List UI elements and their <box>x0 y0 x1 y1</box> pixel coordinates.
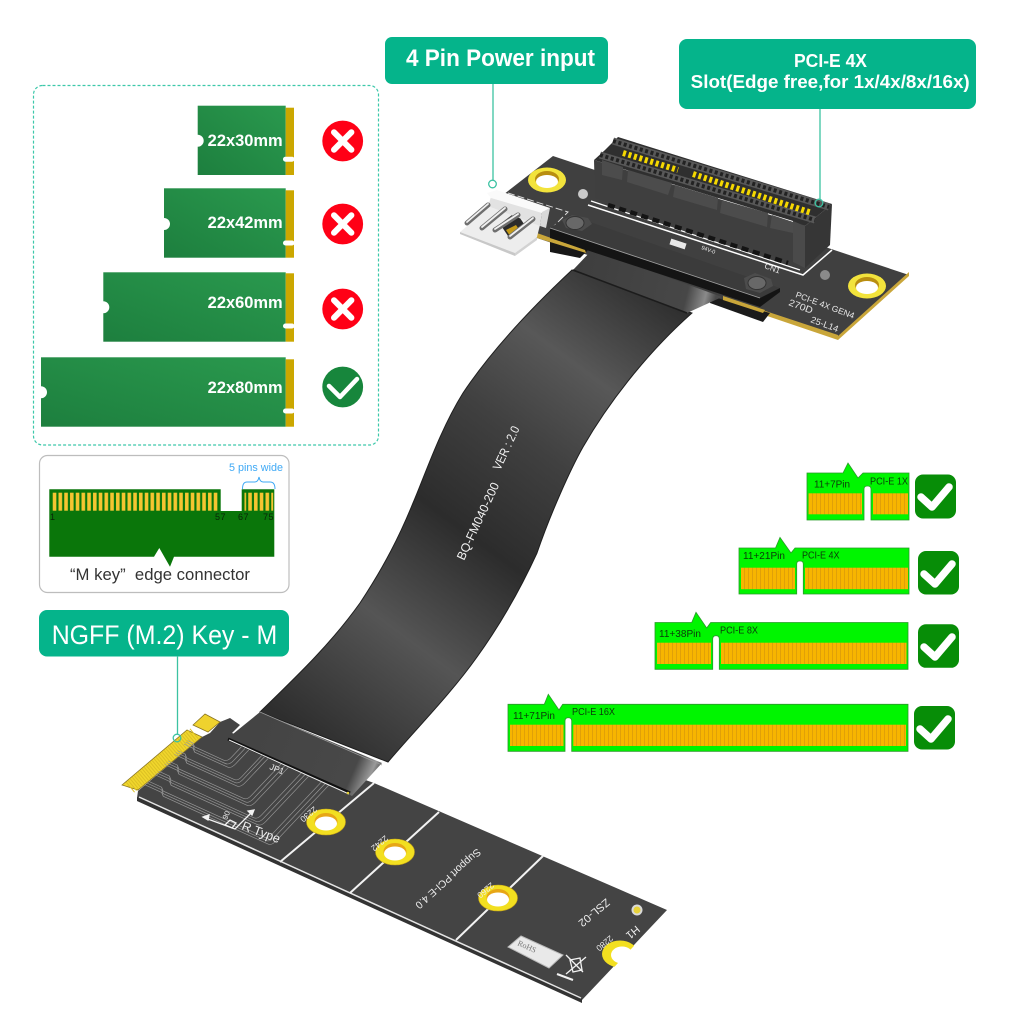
4 pin power connector <box>460 190 550 256</box>
power pin highlights <box>467 204 533 236</box>
icon: rejected 22x42 <box>322 204 363 244</box>
leader: NGFF edge <box>173 656 181 742</box>
board silkscreen text: 270D <box>787 298 814 317</box>
slot comb: front row base <box>600 155 815 220</box>
PCB: M.2 board <box>122 714 700 1003</box>
pins: contacts 1 to 57 <box>52 493 219 511</box>
test point <box>632 904 642 916</box>
mounting hole: 2242 <box>376 839 414 865</box>
PCB: PCI-E adapter board <box>490 156 909 340</box>
R type right-angle symbol <box>203 810 254 829</box>
slot card: PCI-E 4X <box>739 538 909 594</box>
card: 22x42mm: 22x42mm <box>208 214 283 232</box>
slot card: PCI-E 16X: 11+71Pin <box>513 710 555 722</box>
icon: check 4X <box>918 551 959 594</box>
panel: M key edge connector <box>40 456 289 592</box>
slot card: PCI-E 16X <box>508 694 908 751</box>
slot comb: rear row teeth <box>613 141 829 207</box>
ribbon cable <box>260 270 692 762</box>
mounting hole: 2230 <box>306 809 346 835</box>
board silkscreen text: 2230 <box>298 804 319 824</box>
icon: rejected 22x30 <box>322 121 363 161</box>
label: 4 Pin Power input: 4 Pin Power input <box>406 45 595 72</box>
board traces <box>143 727 329 846</box>
cable print: model and version <box>454 424 523 562</box>
leader: PCI-E slot <box>815 109 823 207</box>
board silkscreen text: 94V-0 <box>700 245 716 256</box>
cable print: model and version: VER : 2.0 <box>490 424 523 472</box>
pin numbers: 57 <box>215 512 226 522</box>
front panels <box>602 160 793 233</box>
callout: 5 pins wide: 5 pins wide <box>229 462 283 474</box>
pins: contacts 67 to 75 <box>244 493 273 511</box>
icon: check 8X <box>918 624 959 668</box>
board silkscreen text: Support PCI-E 4.0 <box>412 846 483 911</box>
slot card: PCI-E 1X: PCI-E 1X <box>870 475 908 487</box>
caption: M key edge connector: “M key” edge connector <box>70 565 250 584</box>
button: right <box>744 273 773 293</box>
slot card: PCI-E 8X: 11+38Pin <box>659 628 701 640</box>
board silkscreen text <box>221 762 642 953</box>
label: PCI-E 4X slot: Slot(Edge free,for 1x/4x/8x/16x) <box>691 72 970 92</box>
mounting notch: 2280 <box>582 910 700 1001</box>
underside: black clamp pieces <box>537 233 770 322</box>
leader: power input <box>489 84 496 188</box>
mounting hole: 2260 <box>478 885 518 911</box>
cable strain relief: top <box>573 250 722 313</box>
board silkscreen text: JP1 <box>268 762 286 776</box>
length dividers <box>280 783 543 940</box>
mounting hole: right <box>848 274 886 298</box>
pin numbers: 75 <box>263 512 274 522</box>
icon: check 1X <box>915 474 956 518</box>
card: 22x80mm <box>35 357 294 427</box>
connector footprint outline <box>508 193 568 228</box>
icon: check 16X <box>914 706 955 750</box>
icon: accepted 22x80 <box>322 367 363 407</box>
icon: WEEE bin <box>557 955 586 980</box>
label: NGFF (M.2) Key - M <box>39 610 289 656</box>
panel: M.2 card lengths <box>34 86 378 445</box>
board silkscreen text: CN1 <box>763 261 782 276</box>
pin numbers: 67 <box>238 512 249 522</box>
board silkscreen text: ZSL-02 <box>576 896 612 929</box>
card: 22x60mm <box>97 272 294 342</box>
pin numbers: 1 <box>50 512 56 522</box>
slot card: PCI-E 4X: 11+21Pin <box>743 550 785 562</box>
gold fingers: main <box>122 730 202 790</box>
power pins <box>467 205 533 237</box>
pin numbers <box>50 512 274 522</box>
card: 22x42mm <box>158 188 294 258</box>
slot card: PCI-E 8X: PCI-E 8X <box>720 625 758 637</box>
board silkscreen text <box>669 239 856 334</box>
slot card: PCI-E 8X <box>655 612 908 669</box>
slot comb: rear row base <box>613 141 829 207</box>
RoHS sticker <box>508 936 563 968</box>
board silkscreen text: PCI-E 4X GEN4 <box>794 290 856 321</box>
gold fingers: short <box>193 714 220 732</box>
board silkscreen text: 2260 <box>475 880 496 900</box>
diagram: M key board <box>49 489 274 567</box>
card: 22x60mm: 22x60mm <box>208 294 283 312</box>
board silkscreen text: 25-L14 <box>809 315 840 334</box>
gold contacts: long section <box>693 174 812 213</box>
label: PCI-E 4X slot <box>679 39 976 109</box>
label: 4 Pin Power input <box>385 37 608 84</box>
board silkscreen text: 90 <box>221 810 232 821</box>
label: PCI-E 4X slot: PCI-E 4X <box>794 51 867 71</box>
gold contacts: short section <box>623 153 678 170</box>
mounting hole: left <box>528 168 566 192</box>
board silkscreen text: R Type <box>240 819 282 846</box>
PCI-E 4X slot connector <box>588 137 832 275</box>
board silkscreen text: H1 <box>623 923 642 941</box>
callout: 5 pins wide <box>229 462 283 489</box>
icon: rejected 22x60 <box>322 289 363 329</box>
slot card: PCI-E 4X: PCI-E 4X <box>802 550 840 562</box>
label: NGFF (M.2) Key - M: NGFF (M.2) Key - M <box>52 620 277 650</box>
card: 22x30mm <box>192 106 294 175</box>
slot card: PCI-E 1X <box>807 463 909 520</box>
card: 22x80mm: 22x80mm <box>208 379 283 397</box>
slot card: PCI-E 1X: 11+7Pin <box>814 479 850 491</box>
board silkscreen text: 2280 <box>594 933 615 953</box>
cable print: model and version: BQ-FM040-200 <box>454 480 502 562</box>
RoHS sticker: RoHS <box>516 939 538 955</box>
cable end block with JP1 socket <box>228 712 382 796</box>
slot comb: front row teeth <box>600 155 815 220</box>
button: left <box>562 215 592 231</box>
card: 22x30mm: 22x30mm <box>208 132 283 150</box>
clamp bar with buttons <box>550 215 780 307</box>
board silkscreen text: 2242 <box>369 833 390 853</box>
slot card: PCI-E 16X: PCI-E 16X <box>572 706 615 718</box>
